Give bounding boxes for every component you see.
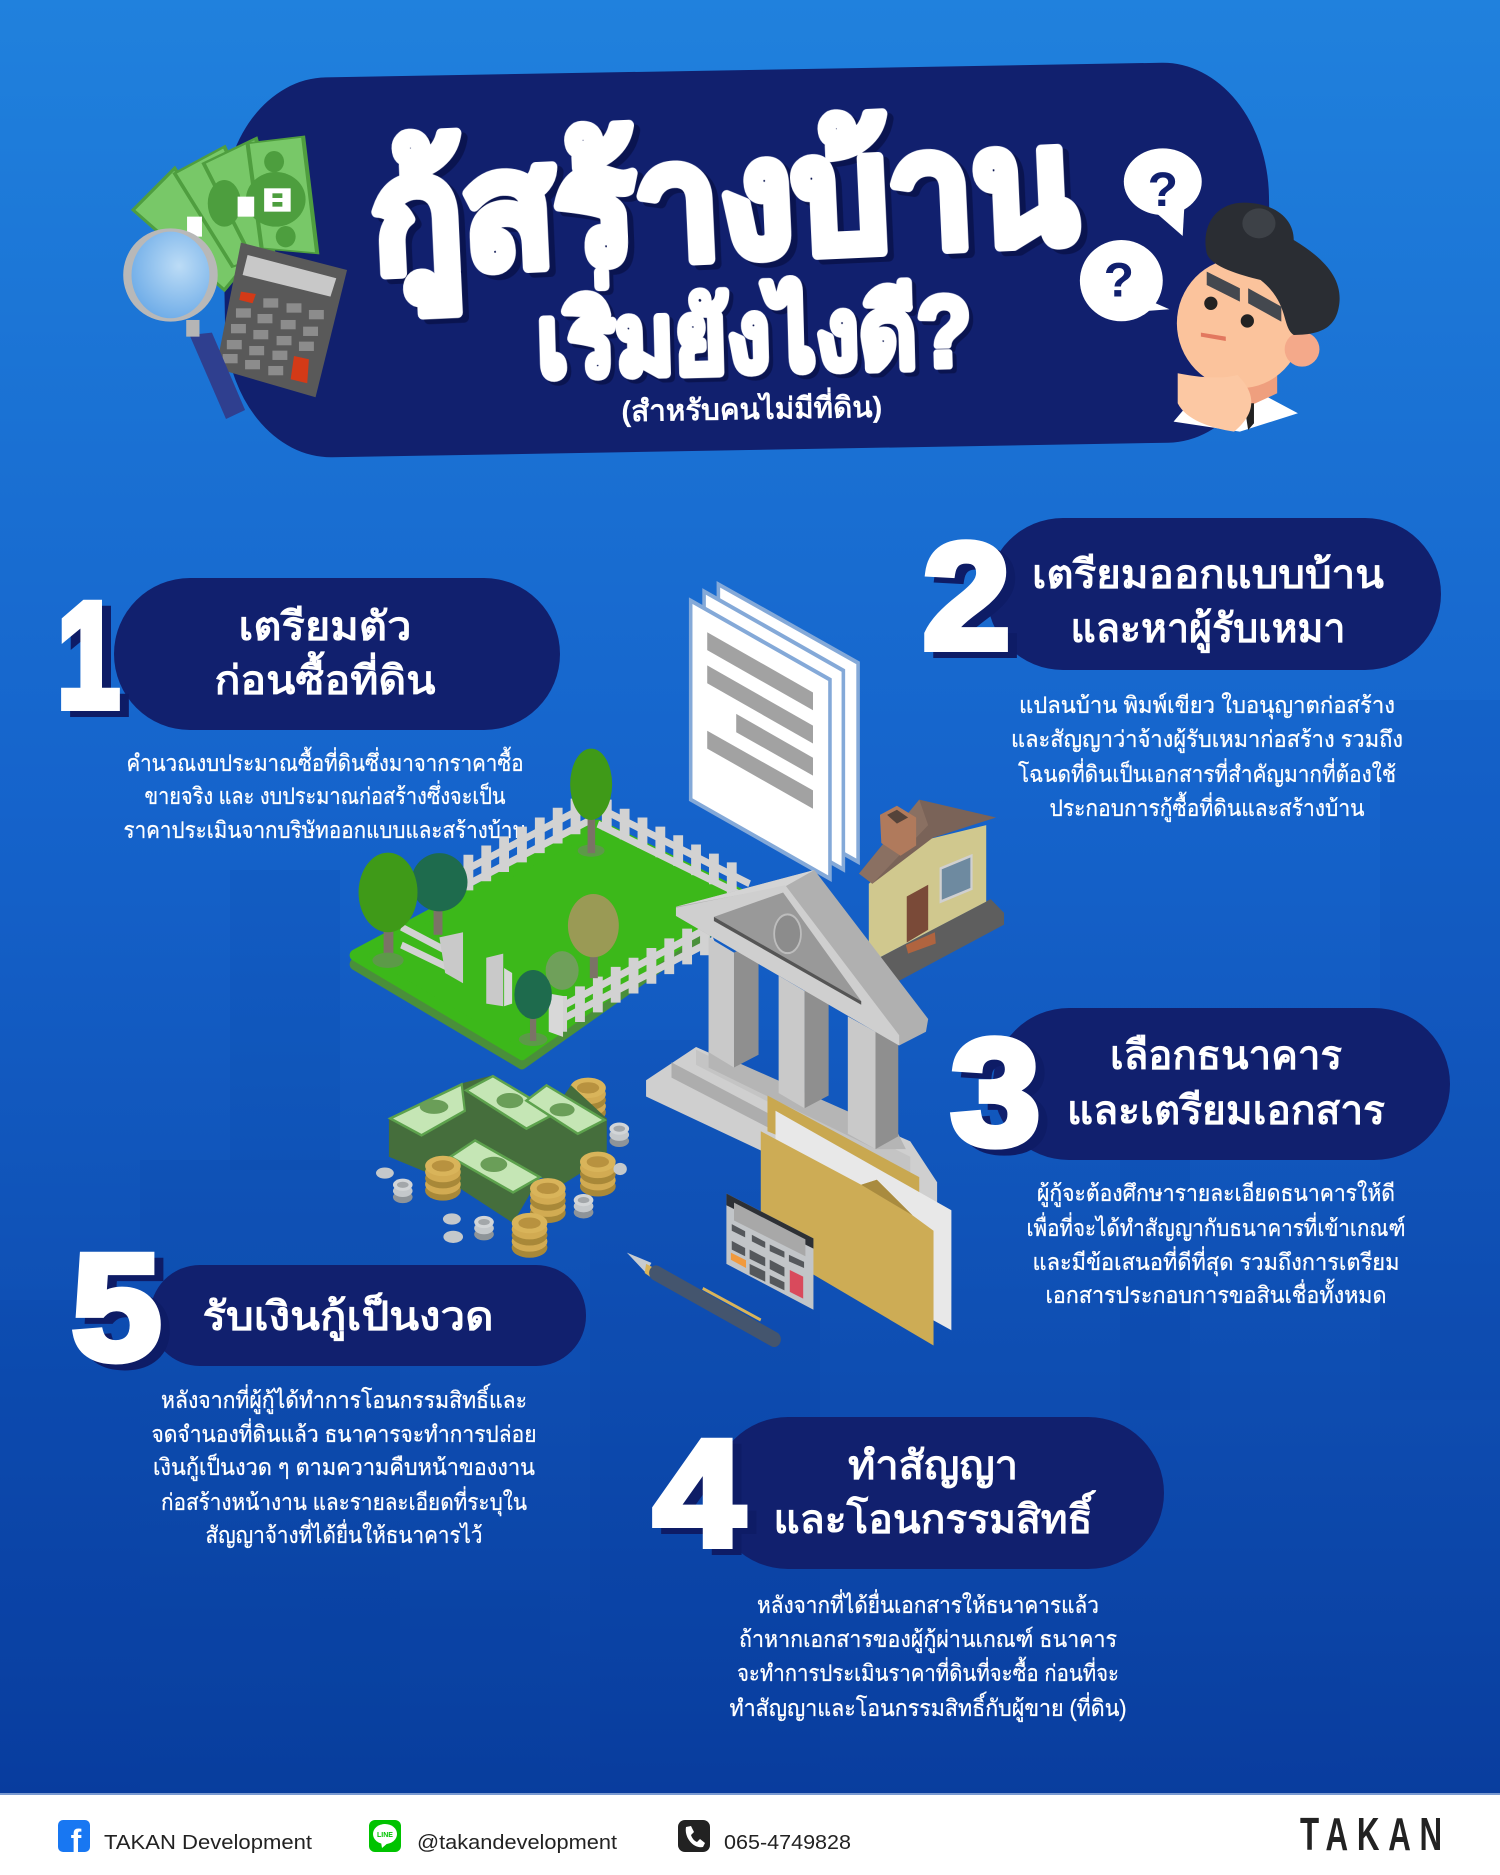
phone number: 065-4749828 <box>724 1832 851 1854</box>
step 1 heading: เตรียมตัว <box>238 605 412 649</box>
icon: small calculator <box>726 1193 813 1310</box>
step 4 body text: จะทำการประเมินราคาที่ดินที่จะซื้อ ก่อนที่จะ <box>737 1657 1119 1686</box>
icon: man <box>1174 203 1340 432</box>
step 2 body text <box>1011 692 1403 822</box>
step 4 body text <box>730 1589 1126 1722</box>
step 5 body text: จดจำนองที่ดินแล้ว ธนาคารจะทำการปล่อย <box>152 1418 536 1447</box>
icon: question bubble top <box>1124 148 1202 236</box>
icon: question bubble top: ? <box>1148 164 1178 217</box>
icon: thinking man with question bubbles <box>1080 148 1340 432</box>
icon: documents <box>691 584 858 879</box>
step 3 pill <box>993 1008 1450 1160</box>
facebook name: TAKAN Development <box>104 1832 312 1854</box>
icon: money, magnifier and calculator <box>127 137 347 419</box>
step 2 pill <box>987 518 1441 670</box>
icon: line <box>369 1820 401 1852</box>
step 5 number: 5 <box>72 1223 161 1391</box>
step 3 body text: เอกสารประกอบการขอสินเชื่อทั้งหมด <box>1046 1279 1386 1308</box>
step 4 heading <box>774 1444 1097 1542</box>
icon: folder <box>761 1096 951 1346</box>
step 3 body text: ผู้กู้จะต้องศึกษารายละเอียดธนาคารให้ดี <box>1037 1180 1395 1207</box>
icon: calculator <box>216 243 347 397</box>
step 4 heading: และโอนกรรมสิทธิ์ <box>774 1490 1097 1542</box>
step 1 heading <box>214 605 436 703</box>
footer <box>0 1793 1500 1875</box>
step 3 number: 3 <box>951 1008 1040 1176</box>
icon: phone <box>678 1820 710 1852</box>
step 2 body text: และสัญญาว่าจ้างผู้รับเหมาก่อสร้าง รวมถึง <box>1011 726 1403 753</box>
title: main headline: กู้สร้างบ้าน <box>367 95 1080 317</box>
step 2 heading <box>1032 553 1384 653</box>
step 1 body text <box>124 747 527 843</box>
step 3 heading <box>1067 1034 1386 1133</box>
step 5 pill <box>150 1265 586 1366</box>
step 2 number: 2 <box>923 512 1010 680</box>
panel: step 3 <box>951 1008 1450 1308</box>
step 1 body text: ขายจริง และ งบประมาณก่อสร้างซึ่งจะเป็น <box>144 780 506 809</box>
logo: TAKAN <box>1300 1809 1442 1861</box>
step 4 body text: หลังจากที่ได้ยื่นเอกสารให้ธนาคารแล้ว <box>757 1589 1099 1618</box>
step 1 heading: ก่อนซื้อที่ดิน <box>214 651 436 703</box>
panel: step 4 <box>654 1409 1164 1722</box>
step 5 heading: รับเงินกู้เป็นงวด <box>202 1291 494 1341</box>
step 4 body text: ทำสัญญาและโอนกรรมสิทธิ์กับผู้ขาย (ที่ดิน) <box>730 1691 1126 1722</box>
panel: title banner <box>221 61 1273 459</box>
step 3 body text: เพื่อที่จะได้ทำสัญญากับธนาคารที่เข้าเกณฑ์ <box>1026 1212 1406 1241</box>
icon: facebook: f <box>71 1823 82 1859</box>
title: second line: เริ่มยังไงดี? <box>535 260 973 399</box>
step 1 number: 1 <box>57 571 120 739</box>
illustration: land, documents, house, bank, money, folder <box>355 584 1004 1346</box>
step 3 body text <box>1026 1180 1406 1308</box>
step 1 body text: ราคาประเมินจากบริษัทออกแบบและสร้างบ้าน <box>124 817 527 843</box>
step 4 heading: ทำสัญญา <box>848 1444 1018 1489</box>
step 5 body text: ก่อสร้างหน้างาน และรายละเอียดที่ระบุใน <box>161 1486 527 1516</box>
step 1 body text: คำนวณงบประมาณซื้อที่ดินซึ่งมาจากราคาซื้อ <box>126 747 524 776</box>
step 4 body text: ถ้าหากเอกสารของผู้กู้ผ่านเกณฑ์ ธนาคาร <box>739 1626 1117 1653</box>
icon: land plot with fence and trees <box>355 749 750 1064</box>
step 5 body text <box>152 1383 536 1548</box>
icon: question bubble bottom: ? <box>1104 254 1134 307</box>
step 4 pill <box>712 1417 1164 1569</box>
title: subtitle: (สำหรับคนไม่มีที่ดิน) <box>621 386 883 428</box>
step 4 number: 4 <box>654 1409 744 1577</box>
icon: cash and coins <box>376 1075 629 1258</box>
step 2 body text: ประกอบการกู้ซื้อที่ดินและสร้างบ้าน <box>1050 792 1365 822</box>
icon: question bubble bottom <box>1080 240 1169 321</box>
step 5 body text: สัญญาจ้างที่ได้ยื่นให้ธนาคารไว้ <box>206 1519 482 1548</box>
panel: step 5 <box>72 1223 586 1548</box>
icon: facebook <box>58 1820 90 1859</box>
step 5 body text: หลังจากที่ผู้กู้ได้ทำการโอนกรรมสิทธิ์และ <box>161 1383 527 1414</box>
icon: house <box>859 800 1004 981</box>
icon: line: LINE <box>377 1832 393 1839</box>
step 3 heading: และเตรียมเอกสาร <box>1067 1089 1386 1133</box>
panel: step 2 <box>923 512 1441 822</box>
step 2 body text: โฉนดที่ดินเป็นเอกสารที่สำคัญมากที่ต้องใช้ <box>1018 758 1396 787</box>
icon: bank building <box>646 870 937 1233</box>
step 3 body text: และมีข้อเสนอที่ดีที่สุด รวมถึงการเตรียม <box>1032 1246 1400 1276</box>
step 2 heading: และหาผู้รับเหมา <box>1070 607 1346 653</box>
panel: step 1 <box>57 571 560 843</box>
step 1 pill <box>114 578 560 730</box>
step 2 body text: แปลนบ้าน พิมพ์เขียว ใบอนุญาตก่อสร้าง <box>1019 692 1395 719</box>
step 5 body text: เงินกู้เป็นงวด ๆ ตามความคืบหน้าของงาน <box>153 1452 535 1481</box>
icon: pen <box>627 1253 774 1339</box>
step 2 heading: เตรียมออกแบบบ้าน <box>1032 553 1384 597</box>
icon: magnifier <box>127 230 245 419</box>
icon: bank notes <box>133 137 317 290</box>
step 3 heading: เลือกธนาคาร <box>1110 1034 1343 1078</box>
line account: @takandevelopment <box>417 1832 617 1854</box>
